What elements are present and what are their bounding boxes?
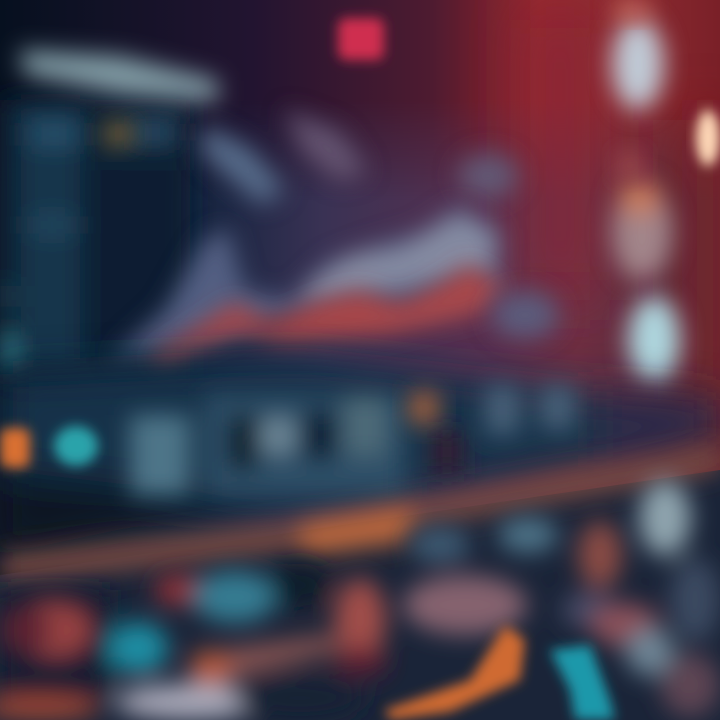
small amber marker bbox=[101, 120, 135, 148]
bottom colourful blurred objects bbox=[0, 480, 720, 720]
pink-red square marker bbox=[338, 18, 384, 60]
diagonal orange ledge bbox=[0, 445, 720, 584]
orange indicator bbox=[0, 428, 30, 468]
red side glow bbox=[520, 0, 720, 400]
edge light glow bbox=[696, 110, 720, 166]
lower dark dashboard band bbox=[0, 360, 720, 555]
heading bar blur bbox=[20, 50, 218, 102]
dashboard tiles bbox=[130, 385, 575, 495]
left dark data table bbox=[0, 100, 190, 380]
right glowing panels bbox=[612, 0, 720, 384]
faint chart echo bbox=[491, 291, 559, 339]
orange marker top bbox=[612, 0, 652, 20]
pale top panel bbox=[612, 18, 664, 110]
pale blue lower panel bbox=[628, 296, 680, 384]
diagonal grey streaks bbox=[200, 110, 518, 205]
top red glow bbox=[18, 0, 720, 177]
orange-grey middle panel bbox=[612, 180, 672, 280]
bottom area bbox=[0, 470, 720, 720]
grey mountain area behind chart bbox=[110, 205, 500, 360]
orange diagonal streak bottom bbox=[385, 625, 525, 720]
red-orange line chart bbox=[150, 264, 505, 368]
teal curved shape bottom bbox=[550, 645, 615, 720]
teal indicator bbox=[54, 426, 98, 466]
amber small indicator bbox=[408, 390, 440, 426]
